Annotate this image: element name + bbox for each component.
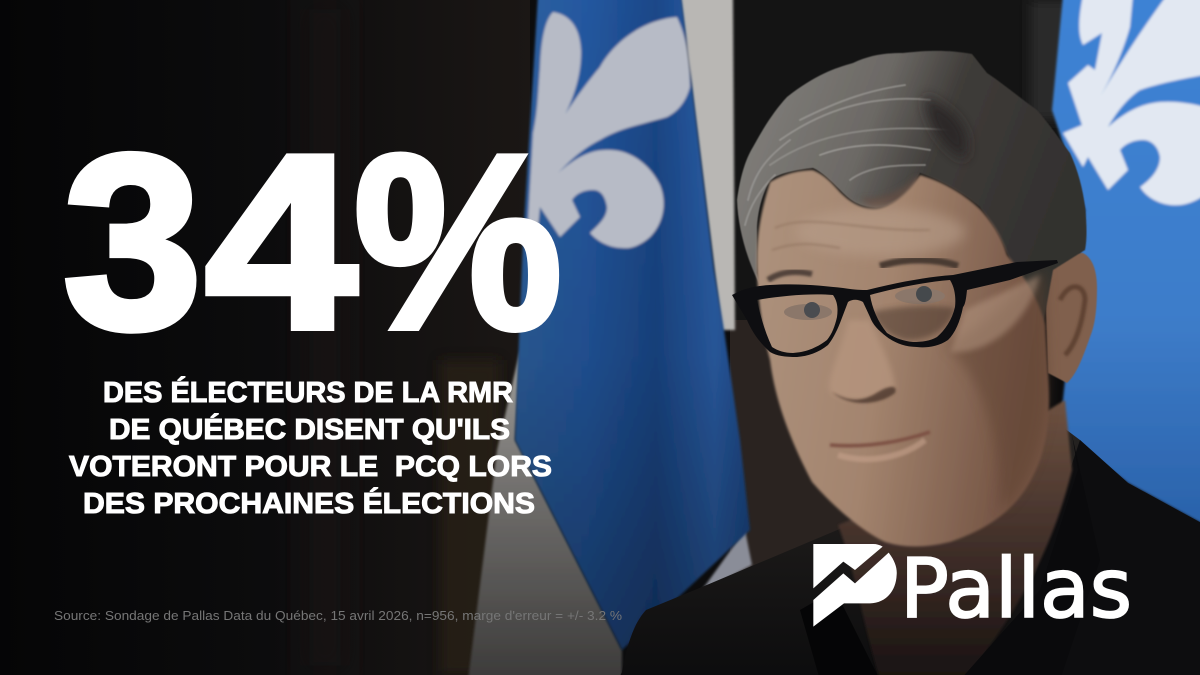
glasses [732,260,1058,357]
headline number: 4 [205,102,357,380]
wordmark: Pallas [900,542,1132,637]
Pallas logo [813,542,1132,637]
forehead wrinkles [772,222,930,250]
statement text: VOTERONT POUR LE PCQ LORS [69,451,552,483]
statement text: DE QUÉBEC DISENT QU'ILS [109,412,510,446]
portrait of man with glasses [618,51,1200,675]
fleur-de-lis right [1063,0,1200,205]
source note: Source: Sondage de Pallas Data du Québec, 15 avril 2026, n=956, marge d'erreur = +/- 3.2 % [54,609,622,623]
under-lens shadow [872,306,955,340]
shadow on cheek [945,270,1048,510]
forehead highlight [795,208,965,256]
icon: Pallas P speech bubble with zigzag [813,544,897,627]
ear [1045,253,1097,383]
headline number [63,102,562,380]
white flag fold [468,350,622,675]
shirt collar [800,590,880,675]
statement text: DES PROCHAINES ÉLECTIONS [83,486,535,520]
neck [838,400,1072,675]
hair [737,51,1086,325]
nose [829,320,895,400]
statement text [69,375,552,520]
face [757,170,1049,546]
jacket [618,425,1200,675]
white flagpole strip [680,0,735,330]
hairline dark patch [860,178,922,208]
headline number: % [354,102,562,380]
right Quebec flag [1052,0,1200,525]
lip smile [830,432,930,446]
statement text: DES ÉLECTEURS DE LA RMR [103,375,513,409]
hair strands [745,85,950,225]
temple light [950,275,1040,352]
fleur-de-lis central [527,12,690,248]
headline number: 3 [63,102,202,380]
eyes [784,304,832,320]
central Quebec flag [515,0,750,650]
hair dark patch [925,95,967,160]
eyebrows [768,272,812,280]
